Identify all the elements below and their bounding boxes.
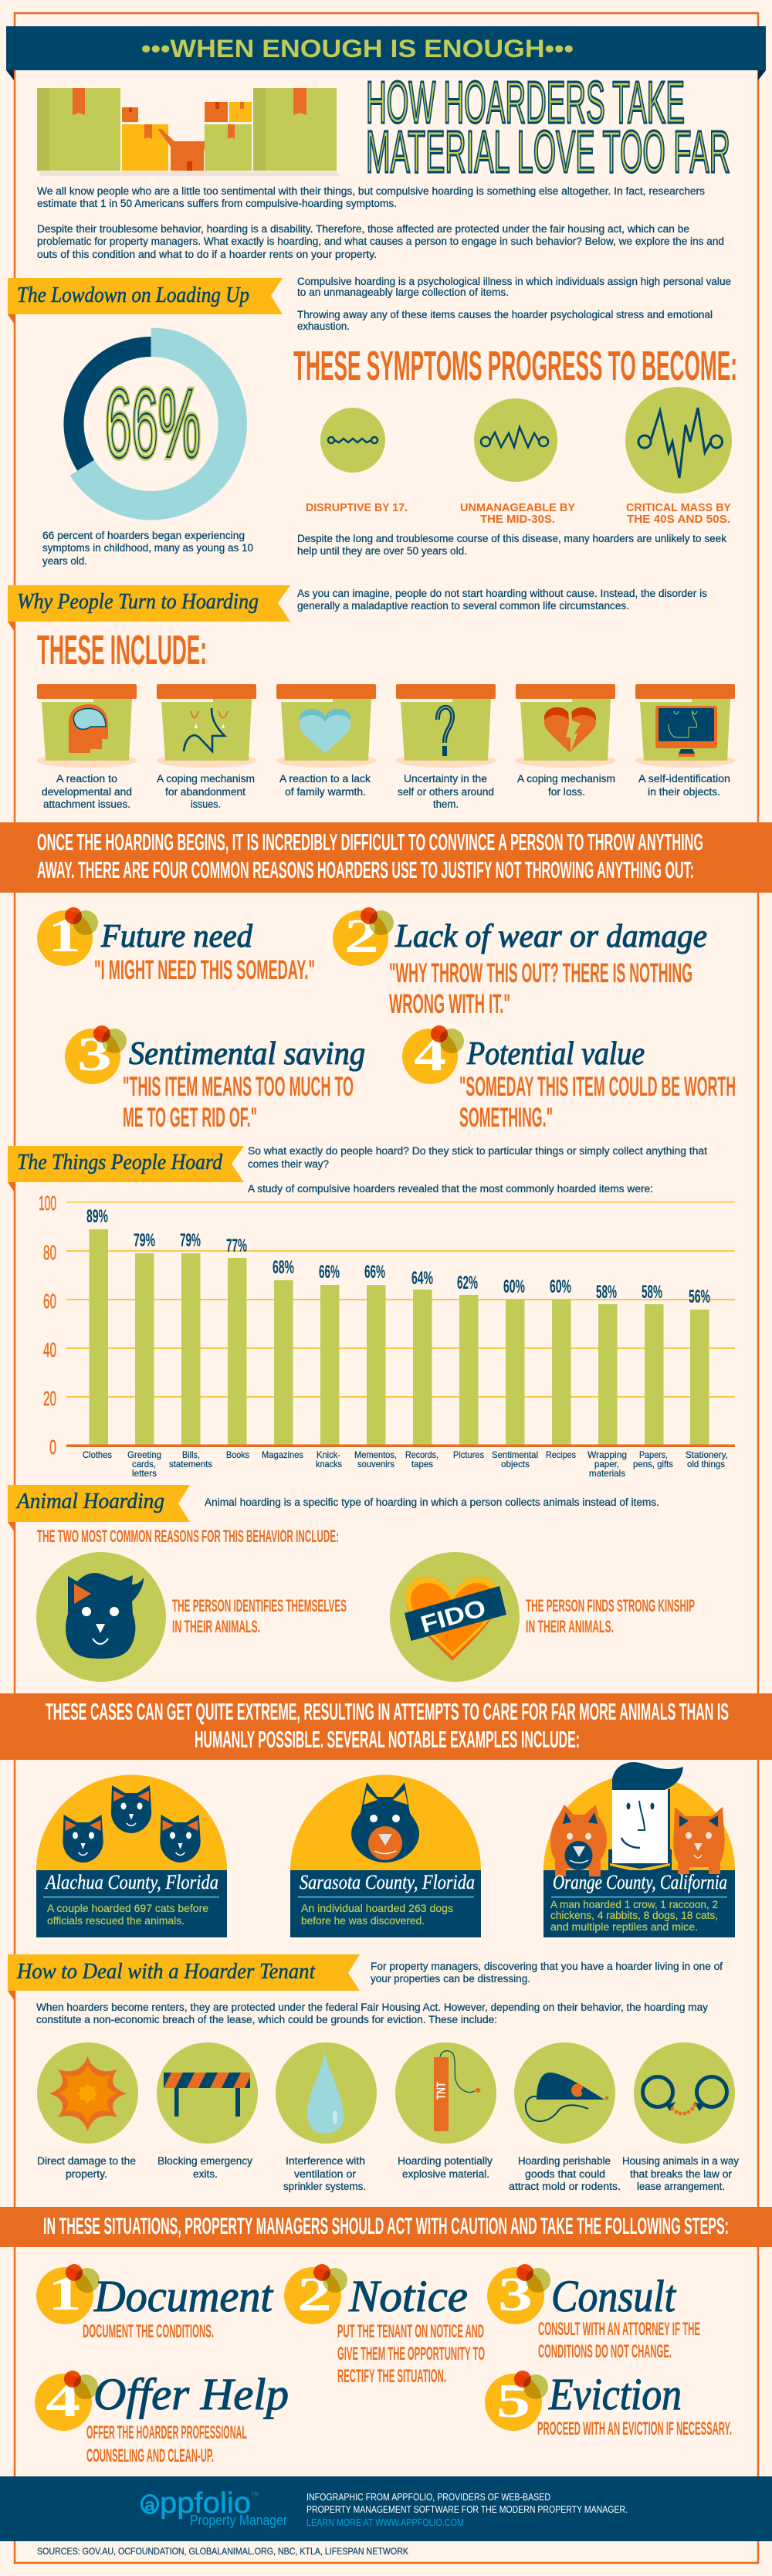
- text: seek help: help until they are over 50 years old.: [297, 545, 467, 557]
- breach: perishable goods: goods that could: [525, 2168, 605, 2180]
- reason 4: potential value: Potential value: [466, 1036, 645, 1072]
- breach: direct damage: Direct damage to the: [37, 2155, 136, 2167]
- step 1: document: DOCUMENT THE CONDITIONS.: [83, 2321, 214, 2342]
- step 2: notice: Notice: [348, 2271, 468, 2321]
- card: Alachua County: officials rescued the animals.: [47, 1915, 185, 1927]
- bar chart: commonly hoarded items: Stationery,: [686, 1449, 728, 1460]
- bar chart: commonly hoarded items: cards,: [132, 1459, 156, 1469]
- bar chart: commonly hoarded items: 66%: [364, 1262, 385, 1283]
- card: Alachua County: [36, 1774, 227, 1937]
- reason 3: sentimental saving: ME TO GET RID OF.": [123, 1103, 257, 1133]
- icon: large pulse: [625, 387, 732, 493]
- icon: dog with human hair: [36, 1552, 166, 1682]
- bin: uncertainty: them.: [433, 798, 459, 810]
- reason 4: potential value: SOMETHING.": [459, 1103, 553, 1133]
- breach: explosive material: TNT: [435, 2082, 448, 2100]
- section banner: Why People Turn to Hoarding: [8, 585, 290, 631]
- breach: housing animals: lease arrangement.: [637, 2181, 725, 2192]
- logo: appfolio: a: [144, 2495, 156, 2516]
- footer: INFOGRAPHIC FROM APPFOLIO, PROVIDERS OF WEB-BASED: [306, 2491, 550, 2503]
- bin: developmental: developmental and: [42, 786, 132, 798]
- text: THESE INCLUDE:: [37, 627, 207, 673]
- bin: abandonment: A coping mechanism: [157, 773, 255, 785]
- bin: abandonment: [156, 684, 256, 810]
- text: property managers: your properties can be distressing.: [371, 1973, 530, 1985]
- text: seek help: Despite the long and troublesome course of this disease, many hoarders are unlikely to seek: [297, 533, 726, 544]
- bin: family warmth: [276, 684, 377, 798]
- intro text: outs of this condition and what to do if a hoarder rents on your property.: [37, 249, 377, 260]
- bar chart: commonly hoarded items: [39, 1191, 735, 1479]
- step 4: offer help: [35, 2369, 289, 2466]
- donut caption: years old.: [42, 555, 87, 567]
- bar chart: commonly hoarded items: Magazines: [262, 1449, 303, 1460]
- bar chart: commonly hoarded items: Sentimental: [492, 1449, 538, 1460]
- reason 2: lack of wear or damage: WRONG WITH IT.": [389, 989, 510, 1019]
- bar chart: commonly hoarded items: 62%: [457, 1273, 478, 1293]
- text: compulsive hoarding definition: exhaustion.: [297, 320, 350, 332]
- text: kinship: [526, 1596, 695, 1636]
- reason 3: sentimental saving: Sentimental saving: [129, 1036, 365, 1072]
- reason 2: lack of wear or damage: 2: [344, 910, 379, 963]
- step 1: document: Document: [93, 2271, 274, 2321]
- step 1: document: 1: [48, 2268, 82, 2320]
- donut chart: 66 percent: 66%: [105, 369, 201, 478]
- bar chart: commonly hoarded items: 66%: [319, 1262, 340, 1283]
- breach: sprinkler interference: Interference with: [286, 2155, 365, 2167]
- bin: developmental: A reaction to: [56, 773, 117, 785]
- orange band: once the hoarding begins: [0, 822, 772, 893]
- bar chart: commonly hoarded items: knacks: [316, 1459, 342, 1469]
- section banner: How to Deal with a Hoarder Tenant: [8, 1954, 360, 2000]
- bar chart: commonly hoarded items: Recipes: [546, 1449, 576, 1460]
- breach: blocking exits: Blocking emergency: [157, 2155, 252, 2167]
- section banner: The Lowdown on Loading Up: The Lowdown on Loading Up: [17, 283, 249, 307]
- breach: explosive material: [395, 2042, 496, 2180]
- bar chart: commonly hoarded items: Records,: [405, 1449, 438, 1460]
- bar chart: commonly hoarded items: 60%: [550, 1276, 571, 1297]
- reason 4: potential value: 4: [414, 1029, 446, 1081]
- intro text: estimate that 1 in 50 Americans suffers from compulsive-hoarding symptoms.: [37, 198, 397, 209]
- reason 1: future need: [37, 907, 315, 985]
- text: why people hoard: generally a maladaptive reaction to several common life circumstances.: [297, 600, 629, 612]
- donut chart: 66 percent: 66%: [105, 369, 201, 478]
- text: what people hoard: So what exactly do people hoard? Do they stick to particular things or simply collect anything that: [248, 1145, 707, 1157]
- bar chart: commonly hoarded items: letters: [132, 1468, 157, 1479]
- breach: direct damage: property.: [66, 2168, 107, 2180]
- text: kinship: IN THEIR ANIMALS.: [526, 1617, 614, 1636]
- text: identifies: IN THEIR ANIMALS.: [172, 1617, 260, 1636]
- text: property managers: For property managers, discovering that you have a hoarder living in one of: [371, 1961, 723, 1972]
- bar chart: commonly hoarded items: 40: [43, 1338, 56, 1361]
- bin: self-identification: in their objects.: [648, 786, 720, 798]
- reason 1: future need: 1: [48, 910, 81, 962]
- text: property managers: constitute a non-economic breach of the lease, which could be grounds for eviction. These include:: [36, 2014, 497, 2025]
- bar chart: commonly hoarded items: 89%: [86, 1206, 108, 1227]
- icon: medium pulse: [474, 398, 557, 482]
- step 3: consult: 3: [498, 2269, 533, 2321]
- text: compulsive hoarding definition: to an unmanageably large collection of items.: [297, 286, 509, 298]
- breach: explosive material: Hoarding potentially: [398, 2155, 493, 2167]
- bar chart: commonly hoarded items: 20: [43, 1387, 56, 1410]
- bin: developmental: attachment issues.: [43, 798, 130, 810]
- card: Orange County: A man hoarded 1 crow, 1 raccoon, 2: [550, 1899, 718, 1910]
- intro text: problematic for property managers. What exactly is hoarding, and what causes a person to engage in such behavior? Below, we explore the ins and: [37, 236, 724, 247]
- icon: fido heart: [390, 1552, 520, 1682]
- symptom labels: CRITICAL MASS BY: [626, 502, 731, 514]
- bin: loss: [516, 684, 616, 798]
- breach: housing animals: Housing animals in a way: [622, 2155, 739, 2167]
- text: PUT THE TENANT ON NOTICE AND: [337, 2321, 484, 2342]
- footer: [0, 2476, 772, 2541]
- header banner: [6, 26, 766, 80]
- bin: uncertainty: self or others around: [398, 786, 494, 798]
- step 2: notice: [284, 2264, 485, 2387]
- logo: appfolio: TM: [252, 2493, 259, 2497]
- step 4: offer help: OFFER THE HOARDER PROFESSIONAL: [86, 2422, 247, 2443]
- step 3: consult: Consult: [551, 2271, 677, 2321]
- breach: sprinkler interference: sprinkler systems.: [283, 2181, 366, 2192]
- text: compulsive hoarding definition: Throwing away any of these items causes the hoarder psychological stress and emotional: [297, 309, 713, 320]
- text: property managers: When hoarders become renters, they are protected under the federal Fair Housing Act. However, depending on their behavior, the hoarding may: [36, 2001, 708, 2013]
- bin: loss: for loss.: [548, 786, 585, 798]
- breach: sprinkler interference: ventilation or: [294, 2168, 357, 2180]
- orange band: in these situations: [0, 2207, 772, 2247]
- section banner: The Lowdown on Loading Up: [8, 278, 283, 324]
- reason 3: sentimental saving: [65, 1025, 365, 1133]
- card: Orange County: Orange County, California: [553, 1871, 727, 1893]
- footer: PROPERTY MANAGEMENT SOFTWARE FOR THE MODERN PROPERTY MANAGER.: [306, 2503, 628, 2515]
- symptom labels: [306, 502, 731, 526]
- bar chart: commonly hoarded items: Mementos,: [354, 1449, 397, 1460]
- bin: self-identification: A self-identification: [638, 773, 730, 785]
- bar chart: commonly hoarded items: Knick-: [317, 1449, 340, 1460]
- breach: direct damage: [37, 2042, 138, 2180]
- bar chart: commonly hoarded items: Bills,: [182, 1449, 200, 1460]
- text: compulsive hoarding definition: Compulsive hoarding is a psychological illness in which individuals assign high personal value: [297, 276, 731, 287]
- step 4: offer help: 4: [46, 2374, 80, 2427]
- section banner: The Things People Hoard: [8, 1146, 244, 1191]
- text: property managers: [36, 1961, 723, 2025]
- bar chart: commonly hoarded items: Books: [226, 1449, 249, 1460]
- reason 2: lack of wear or damage: [333, 907, 707, 1019]
- subheading: two most common reasons: THE TWO MOST COMMON REASONS FOR THIS BEHAVIOR INCLUDE:: [37, 1527, 339, 1546]
- bar chart: commonly hoarded items: 60%: [503, 1276, 525, 1297]
- reason 4: potential value: [402, 1025, 736, 1133]
- bar chart: commonly hoarded items: 58%: [596, 1282, 617, 1303]
- step 5: eviction: Eviction: [548, 2369, 682, 2419]
- symptom labels: THE MID-30S.: [480, 514, 555, 526]
- step 2: notice: RECTIFY THE SITUATION.: [337, 2366, 446, 2387]
- symptom labels: UNMANAGEABLE BY: [460, 502, 575, 514]
- text: what people hoard: A study of compulsive hoarders revealed that the most commonly hoarded items were:: [248, 1183, 653, 1195]
- breach: blocking exits: [157, 2042, 258, 2180]
- icon: small pulse: [320, 408, 385, 473]
- bar chart: commonly hoarded items: old things: [687, 1459, 725, 1469]
- orange band: these cases: [0, 1693, 772, 1760]
- header banner: •••WHEN ENOUGH IS ENOUGH•••: [141, 35, 574, 63]
- bar chart: commonly hoarded items: 56%: [689, 1286, 710, 1307]
- bar chart: commonly hoarded items: 77%: [226, 1235, 247, 1256]
- bar chart: commonly hoarded items: 0: [49, 1435, 56, 1459]
- bin: abandonment: issues.: [191, 798, 221, 810]
- text: what people hoard: comes their way?: [248, 1158, 329, 1170]
- logo: appfolio: ppfolio: [160, 2487, 251, 2520]
- sources: SOURCES: GOV.AU, OCFOUNDATION, GLOBALANIMAL.ORG, NBC, KTLA, LIFESPAN NETWORK: [37, 2546, 408, 2557]
- text: GIVE THEM THE OPPORTUNITY TO: [337, 2344, 485, 2364]
- bar chart: commonly hoarded items: 68%: [273, 1257, 294, 1278]
- donut caption: [42, 530, 253, 567]
- breach: housing animals: that breaks the law or: [630, 2168, 733, 2180]
- bar chart: commonly hoarded items: 64%: [411, 1268, 433, 1289]
- text: identifies: [172, 1596, 347, 1636]
- logo: appfolio: [142, 2487, 287, 2528]
- dog left: [550, 1805, 607, 1876]
- symptom labels: DISRUPTIVE BY 17.: [306, 502, 408, 514]
- breach: perishable goods: Hoarding perishable: [518, 2155, 611, 2167]
- text: why people hoard: [297, 588, 707, 612]
- text: what people hoard: [248, 1145, 707, 1195]
- text: why people hoard: As you can imagine, people do not start hoarding without cause. Instead, the disorder is: [297, 588, 707, 599]
- reason 1: future need: "I MIGHT NEED THIS SOMEDAY.": [94, 955, 315, 985]
- bin: uncertainty: [395, 684, 496, 810]
- step 4: offer help: Offer Help: [93, 2369, 289, 2419]
- intro text: [37, 185, 724, 260]
- footer: LEARN MORE AT WWW.APPFOLIO.COM: [306, 2517, 464, 2528]
- bar chart: commonly hoarded items: Wrapping: [587, 1449, 627, 1460]
- intro text: We all know people who are a little too sentimental with their things, but compulsive hoarding is something else altogether. In fact, researchers: [37, 185, 705, 197]
- bar chart: commonly hoarded items: 100: [39, 1191, 56, 1215]
- card: Orange County: chickens, 4 rabbits, 8 dogs, 18 cats,: [550, 1910, 718, 1921]
- card: Sarasota County: Sarasota County, Florida: [300, 1871, 475, 1893]
- bar chart: commonly hoarded items: 80: [43, 1241, 56, 1264]
- section banner: The Things People Hoard: The Things People Hoard: [17, 1151, 223, 1174]
- card: Alachua County: Alachua County, Florida: [44, 1871, 218, 1893]
- step 3: consult: [487, 2264, 700, 2362]
- step 5: eviction: [485, 2369, 732, 2439]
- breach: explosive material: explosive material.: [402, 2168, 489, 2180]
- bar chart: commonly hoarded items: 58%: [642, 1282, 662, 1303]
- reason 1: future need: Future need: [100, 919, 253, 954]
- bin: self-identification: [635, 684, 735, 798]
- section banner: How to Deal with a Hoarder Tenant: How to Deal with a Hoarder Tenant: [16, 1960, 316, 1984]
- card: Orange County: and multiple reptiles and mice.: [550, 1921, 698, 1933]
- illustration: stacked boxes: [37, 88, 340, 176]
- card: Sarasota County: [290, 1774, 481, 1937]
- donut chart: 66 percent: [63, 327, 247, 520]
- bin: abandonment: for abandonment: [165, 786, 245, 798]
- bar chart: commonly hoarded items: souvenirs: [357, 1459, 394, 1469]
- bar chart: commonly hoarded items: objects: [501, 1459, 530, 1469]
- dog right: [673, 1807, 725, 1874]
- bar chart: commonly hoarded items: 79%: [134, 1230, 155, 1251]
- step 5: eviction: 5: [496, 2375, 530, 2428]
- bar chart: commonly hoarded items: paper,: [594, 1459, 619, 1469]
- breach: perishable goods: [509, 2042, 621, 2192]
- reason 2: lack of wear or damage: Lack of wear or damage: [394, 919, 707, 954]
- card: Sarasota County: An individual hoarded 263 dogs: [301, 1903, 453, 1914]
- breach: sprinkler interference: [276, 2042, 377, 2192]
- icon: fido heart: FIDO: [418, 1594, 489, 1639]
- bar chart: commonly hoarded items: materials: [589, 1468, 625, 1479]
- bar chart: commonly hoarded items: tapes: [411, 1459, 433, 1469]
- bin: loss: A coping mechanism: [517, 773, 615, 785]
- text: animal hoarding: Animal hoarding is a specific type of hoarding in which a person collects animals instead of items.: [205, 1496, 659, 1508]
- reason 3: sentimental saving: "THIS ITEM MEANS TOO MUCH TO: [123, 1072, 354, 1102]
- bin: family warmth: of family warmth.: [285, 786, 366, 798]
- card: Orange County: [543, 1762, 735, 1937]
- bar chart: commonly hoarded items: Clothes: [83, 1449, 112, 1460]
- title: [366, 69, 730, 185]
- bin: uncertainty: Uncertainty in the: [404, 773, 487, 785]
- breach: perishable goods: attract mold or rodents.: [509, 2181, 621, 2192]
- bar chart: commonly hoarded items: 79%: [180, 1230, 201, 1251]
- logo: appfolio: Property Manager: [190, 2512, 287, 2528]
- step 2: notice: 2: [297, 2269, 332, 2321]
- card: Alachua County: A couple hoarded 697 cats before: [47, 1903, 208, 1914]
- breach: blocking exits: exits.: [193, 2168, 218, 2180]
- bar chart: commonly hoarded items: Papers,: [639, 1449, 668, 1460]
- step 1: document: [36, 2264, 274, 2342]
- symptom labels: THE 40S AND 50S.: [627, 514, 730, 526]
- donut caption: symptoms in childhood, many as young as 10: [42, 542, 253, 554]
- bar chart: commonly hoarded items: Greeting: [127, 1449, 161, 1460]
- bar chart: commonly hoarded items: Pictures: [453, 1449, 484, 1460]
- intro text: Despite their troublesome behavior, hoarding is a disability. Therefore, those affected are protected under the fair housing act, which can be: [37, 223, 689, 235]
- section banner: Animal Hoarding: Animal Hoarding: [15, 1490, 164, 1513]
- text: seek help: [297, 533, 726, 557]
- text: compulsive hoarding definition: [297, 276, 731, 332]
- bar chart: commonly hoarded items: statements: [169, 1459, 212, 1469]
- card: Sarasota County: before he was discovered.: [301, 1915, 425, 1927]
- step 4: offer help: COUNSELING AND CLEAN-UP.: [86, 2446, 214, 2466]
- bin: family warmth: A reaction to a lack: [279, 773, 371, 785]
- bar chart: commonly hoarded items: 60: [43, 1290, 56, 1313]
- section banner: Animal Hoarding: [8, 1485, 190, 1531]
- breach: housing animals: [622, 2042, 739, 2192]
- bar chart: commonly hoarded items: pens, gifts: [633, 1459, 673, 1469]
- reason 3: sentimental saving: 3: [77, 1029, 112, 1081]
- donut caption: 66 percent of hoarders began experiencing: [42, 530, 245, 541]
- text: identifies: THE PERSON IDENTIFIES THEMSELVES: [172, 1596, 347, 1615]
- bin: developmental: [37, 684, 137, 810]
- section banner: Why People Turn to Hoarding: Why People Turn to Hoarding: [17, 590, 259, 614]
